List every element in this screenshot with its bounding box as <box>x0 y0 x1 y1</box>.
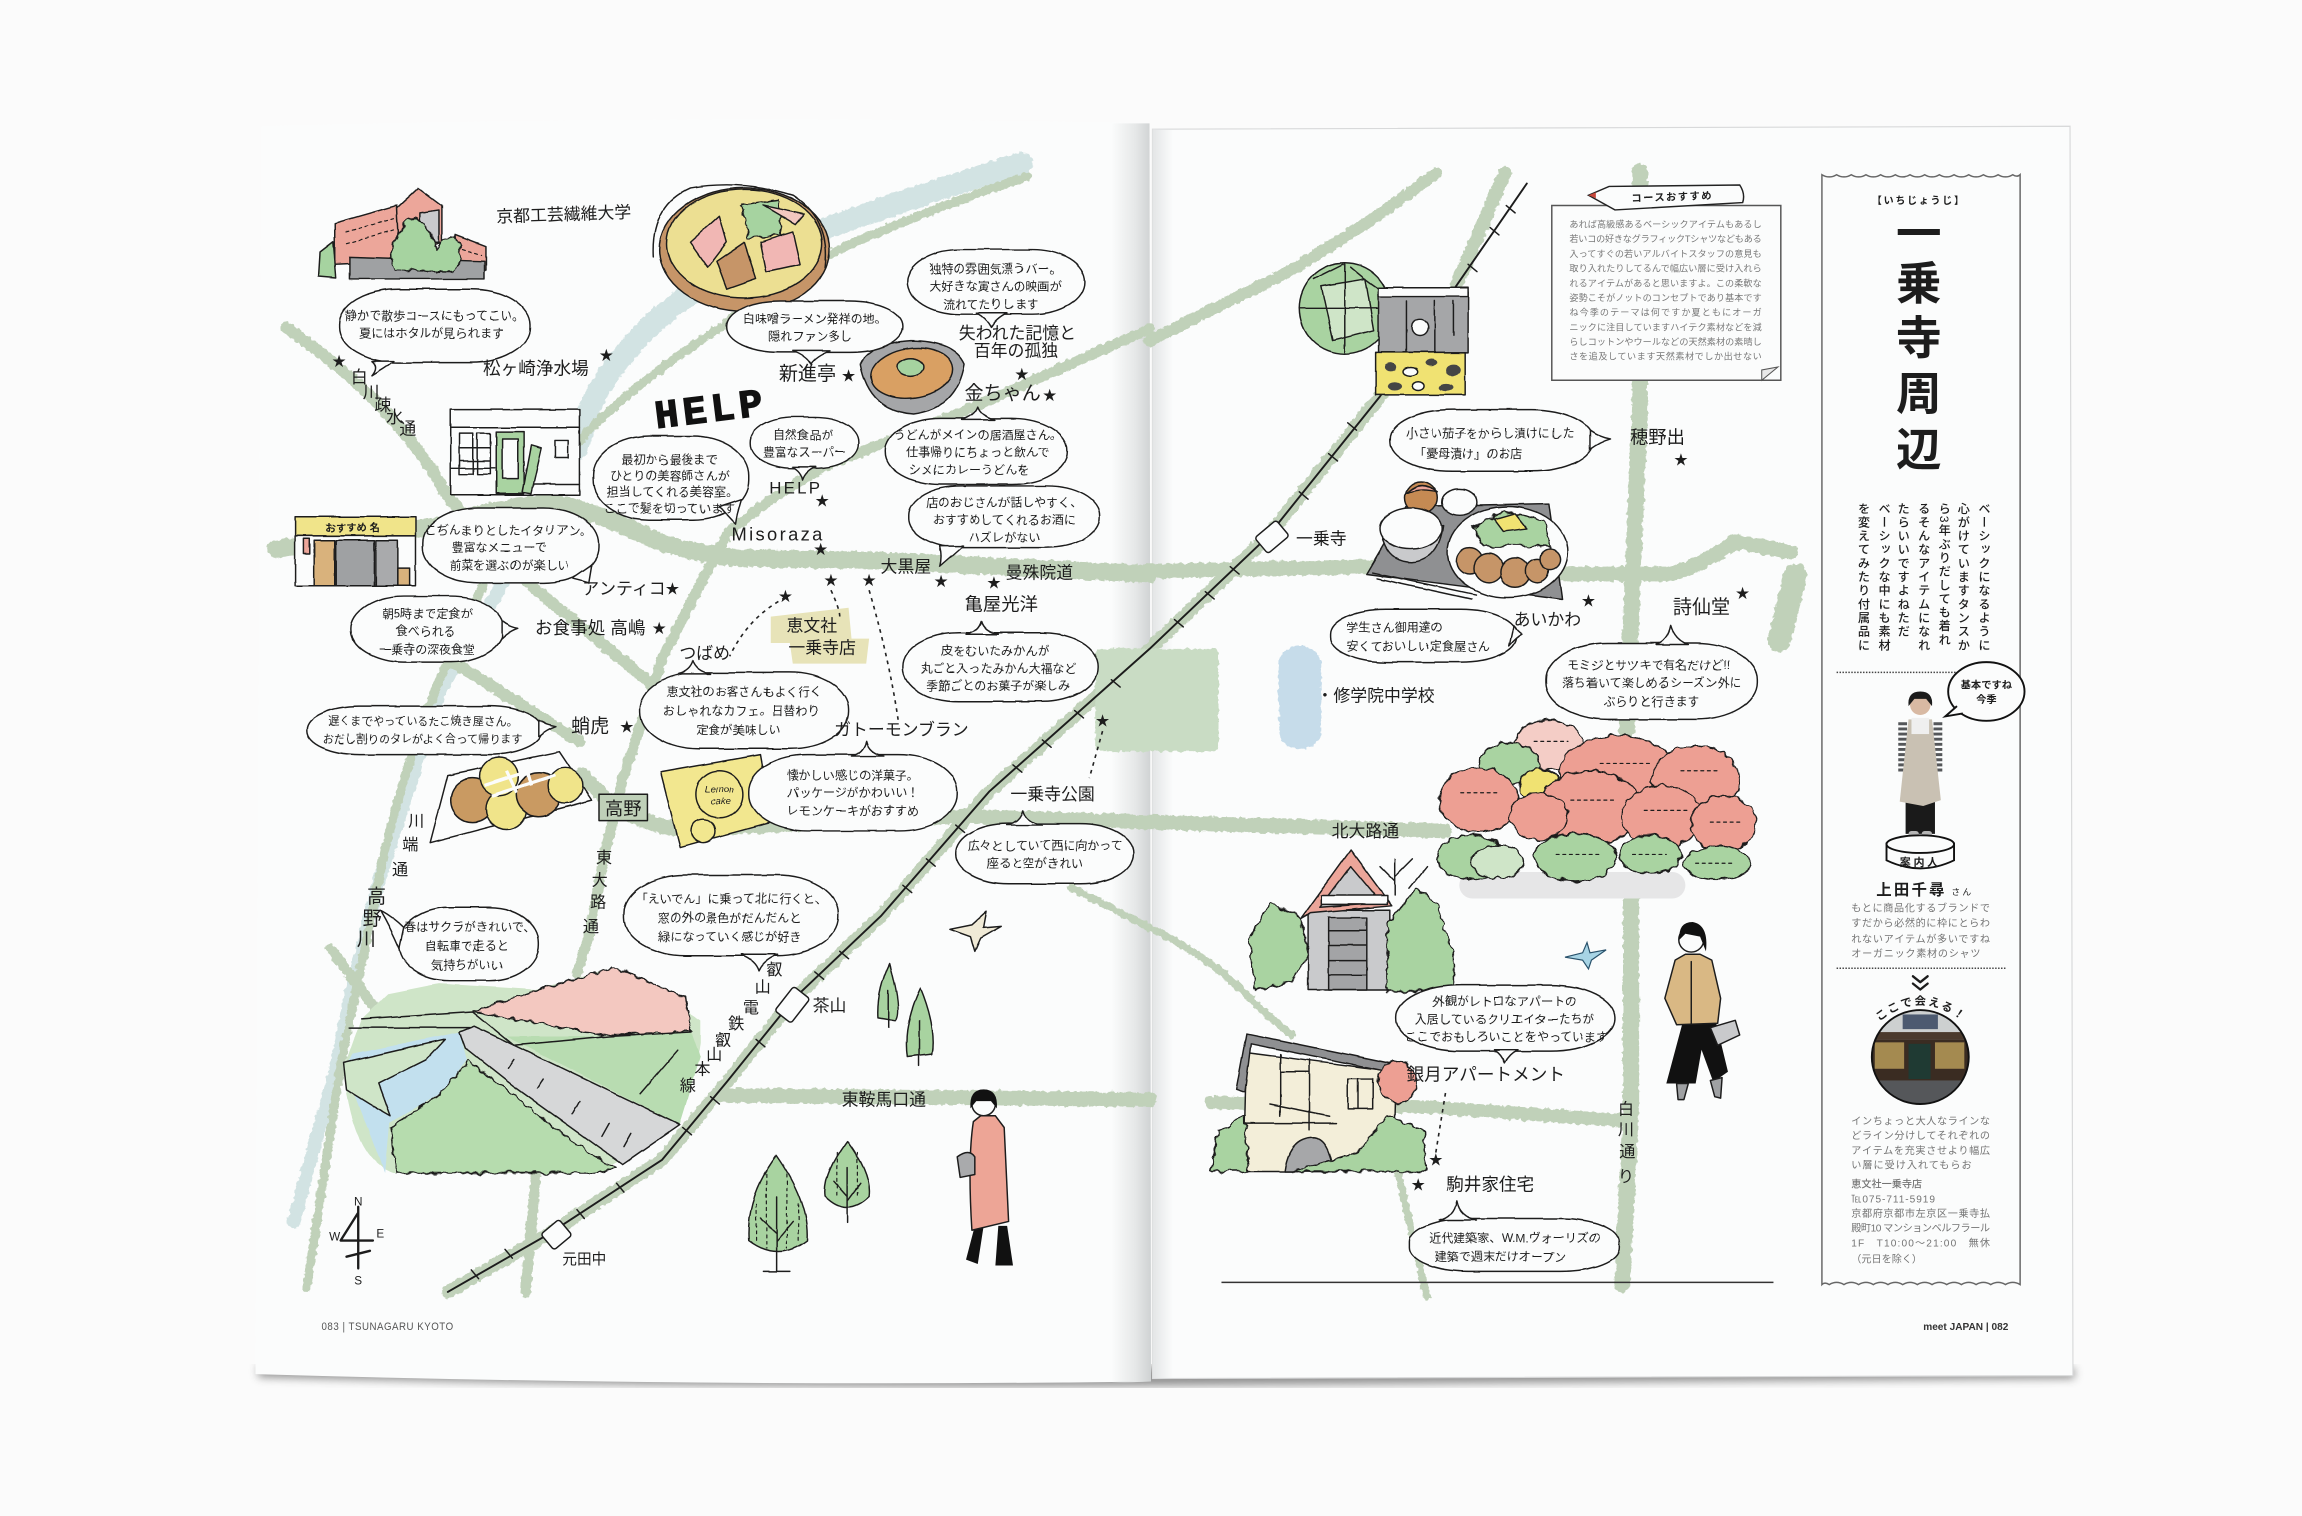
guide comment: オーガニック素材のシャツ <box>1851 947 1980 960</box>
pedestal: 案内人 <box>1900 855 1941 869</box>
speech bubble: 美容室: ここで髪を切っています <box>604 501 735 515</box>
compass <box>329 1195 384 1288</box>
speech bubble: アンティコ: こぢんまりとしたイタリアン。 <box>424 522 591 537</box>
title: 辺 <box>1896 424 1942 475</box>
shop info: 恵文社一乗寺店 <box>1851 1178 1922 1191</box>
label box: 高野: 高野 <box>605 798 642 819</box>
label: つばめ: つばめ <box>679 644 730 663</box>
stars: left page: ★ <box>778 586 793 606</box>
label: 川端通: 川端通 <box>392 813 424 879</box>
speech bubble: ガトーモンブラン: パッケージがかわいい！ <box>787 785 919 800</box>
speech bubble: 高嶋 <box>351 596 518 662</box>
illustration: ramen bowl <box>653 185 829 311</box>
label: 松ヶ崎浄水場: 松ヶ崎浄水場 <box>483 358 589 378</box>
illustration: gable building <box>1249 850 1453 991</box>
speech bubble: つばめ: 定食が美味しい <box>696 722 781 737</box>
speech bubble: 一乗寺公園: 座ると空がきれい <box>987 856 1083 871</box>
speech bubble: 亀屋光洋: 季節ごとのお菓子が楽しみ <box>926 678 1070 693</box>
stars: left page: ★ <box>823 570 839 590</box>
label: 東鞍馬口通: 東鞍馬口通 <box>842 1090 926 1109</box>
map labels: left page <box>351 203 1095 1268</box>
stars: left page: ★ <box>986 573 1001 593</box>
stars: left page: ★ <box>815 490 830 510</box>
pencil tag <box>1588 185 1744 210</box>
stars: left page <box>332 345 1110 737</box>
magazine spread <box>255 120 2074 1386</box>
speech bubble: 高野川 <box>380 907 539 981</box>
label: アンティコ: アンティコ <box>582 580 666 599</box>
speech bubble: 穂野出: 「憂母漬け」のお店 <box>1414 446 1522 461</box>
baseline rule <box>1221 1281 1773 1283</box>
road: 東鞍馬口通 <box>719 1095 1150 1100</box>
illustration: yellow pickle box <box>1376 352 1465 395</box>
station: 元田中 <box>541 1219 572 1250</box>
label: あいかわ: あいかわ <box>1514 610 1581 629</box>
guide name: 上田千尋 さん <box>1876 881 1973 899</box>
speech bubble: 銀月アパートメント <box>1396 985 1615 1063</box>
road: 東大路通 <box>526 329 1150 1292</box>
speech bubble: 銀月アパートメント: ここでおもしろいことをやっています <box>1404 1030 1608 1044</box>
illustration: meal tray <box>1367 482 1568 599</box>
logo: HELP: HELP <box>652 382 770 440</box>
shop info: ℡075-711-5919 <box>1851 1194 1935 1205</box>
note body: れるアイテムがあると思いますよ。この柔軟な <box>1569 277 1762 288</box>
speech bubble: 蛸虎: 遅くまでやっているたこ焼き屋さん。 <box>328 715 517 728</box>
vertical intro text: ベーシックな中にも素材 <box>1877 502 1891 652</box>
stars: left page: ★ <box>862 570 877 590</box>
illustration: shop facade <box>451 410 580 495</box>
speech bubble: 高嶋: 朝5時まで定食が <box>382 606 473 621</box>
speech bubble: アンティコ <box>423 508 599 583</box>
label: 大黒屋: 大黒屋 <box>881 558 931 577</box>
speech bubble: 駒井家住宅: 近代建築家、W.M.ヴォーリズの <box>1429 1230 1601 1245</box>
stars: left page: ★ <box>933 571 949 591</box>
speech bubble: HELP: 自然食品が <box>773 427 833 442</box>
label: 一乗寺公園: 一乗寺公園 <box>1010 785 1095 804</box>
illustration: cabbage ball <box>1299 263 1390 354</box>
stars: left page: ★ <box>1042 385 1057 405</box>
title: 乗 <box>1896 258 1942 309</box>
speech bubble: 美容室: 担当してくれる美容室。 <box>607 485 738 499</box>
shop comment: どライン分けしてそれぞれの <box>1851 1130 1990 1142</box>
label: 修学院中学校: ・修学院中学校 <box>1317 687 1435 706</box>
map labels: right page <box>1296 426 1730 1195</box>
label: お食事処 高嶋: お食事処 高嶋 <box>535 618 645 638</box>
speech bubble: 松ヶ崎: 静かで散歩コースにもってこい。 <box>345 308 524 323</box>
river <box>294 163 1022 1221</box>
station: 一乗寺 <box>1255 520 1289 554</box>
note body <box>1569 219 1762 362</box>
illustration: western house <box>1211 1034 1426 1172</box>
chevrons <box>1913 976 1928 989</box>
label: 茶山: 茶山 <box>813 997 846 1016</box>
shop info <box>1851 1178 1990 1266</box>
vertical intro text <box>1856 502 1991 652</box>
label: 詩仙堂: 詩仙堂 <box>1673 597 1730 619</box>
dashed leader lines: left page <box>730 590 1103 778</box>
compass: S <box>354 1275 362 1288</box>
speech bubble: 大黒屋: ハズレがない <box>968 530 1040 545</box>
label: 失われた記憶と: 失われた記憶と <box>959 324 1076 343</box>
speech bubble: 松ヶ崎: 夏にはホタルが見られます <box>360 326 504 341</box>
label: HELP shop: HELP <box>769 478 822 497</box>
speech bubble: アンティコ: 豊富なメニューで <box>451 541 547 555</box>
speech bubble: 大黒屋 <box>909 486 1100 567</box>
reading: 【いちじょうじ】 <box>1872 195 1966 207</box>
callout: tag 恵文社一乗寺店: 一乗寺店 <box>788 638 856 657</box>
illustration: university building <box>319 188 486 279</box>
callout: tag 恵文社一乗寺店 <box>771 608 869 664</box>
speech bubble: 新進亭: 白味噌ラーメン発祥の地。 <box>743 311 887 326</box>
stars: right page: ★ <box>1581 590 1596 610</box>
guide comment: れないアイテムが多いですね <box>1851 933 1990 946</box>
note paper <box>1552 206 1781 380</box>
shop info: 京都府京都市左京区一乗寺払 <box>1851 1207 1990 1220</box>
stars: right page <box>1411 449 1750 1195</box>
label: 駒井家住宅: 駒井家住宅 <box>1446 1175 1534 1195</box>
speech bubble: 高野川: 気持ちがいい <box>431 957 503 972</box>
speech bubble: 高野川: 自転車で走ると <box>425 939 509 953</box>
shop comment <box>1851 1115 1990 1172</box>
label: 穂野出: 穂野出 <box>1630 426 1685 447</box>
label: 白川通: 白川通り <box>1618 1100 1635 1186</box>
label box: 高野 <box>599 794 647 821</box>
illustration: trees <box>748 963 933 1271</box>
speech bubble: 金ちゃん <box>885 407 1067 484</box>
station: 茶山 <box>775 986 810 1023</box>
stars: left page: ★ <box>1095 711 1110 731</box>
stars: right page: ★ <box>1428 1150 1443 1170</box>
speech bubble: 大黒屋: 店のおじさんが話しやすく、 <box>926 494 1082 509</box>
guide comment: もとに商品化するブランドで <box>1851 902 1990 915</box>
guide comment <box>1851 902 1990 960</box>
speech bubble: 一乗寺公園: 広々としていて西に向かって <box>968 838 1123 853</box>
label: 金ちゃん: 金ちゃん <box>965 382 1041 404</box>
bush foliage <box>1437 719 1756 881</box>
road: 白川疎水通 <box>286 327 652 741</box>
shop info: 1F T10:00〜21:00 無休 <box>1851 1236 1990 1249</box>
speech bubble: 新進亭: 隠れファン多し <box>768 330 852 344</box>
stars: right page: ★ <box>1411 1175 1426 1195</box>
illustration: restaurant 名 <box>295 517 415 586</box>
label: 蛸虎: 蛸虎 <box>571 716 609 738</box>
label: 北大路通: 北大路通 <box>1332 822 1399 841</box>
illustration: lemon cake package: cake <box>711 797 731 808</box>
callout: tag 恵文社一乗寺店: 恵文社 <box>787 616 837 635</box>
note body: ね今季のテーマは何ですか夏ともにオーガ <box>1569 307 1762 318</box>
label: 新進亭: 新進亭 <box>779 363 836 385</box>
speech bubble: つばめ <box>640 661 849 749</box>
title: 周 <box>1896 369 1942 420</box>
speech bubble: 叡山電車 <box>624 875 838 970</box>
dashed leader: 銀月アパートメント <box>1436 1089 1446 1152</box>
speech bubble: 蛸虎: おだし割りのタレがよく合って帰ります <box>323 732 523 746</box>
illustration: small bowl <box>860 341 965 414</box>
speech bubble: 高嶋: 食べられる <box>396 625 456 639</box>
bush flecks <box>1461 741 1740 863</box>
stars: left page: ★ <box>599 345 614 365</box>
speech bubble: 失われた記憶と百年の孤独: 独特の雰囲気漂うバー。 <box>929 261 1061 276</box>
stars: left page: ★ <box>813 539 828 559</box>
speech bubble: 失われた記憶と百年の孤独: 大好きな寅さんの映画が <box>929 279 1061 294</box>
illustration: woman in tan coat <box>1665 922 1740 1100</box>
left page <box>255 120 1151 1383</box>
illustration: woman in pink coat <box>957 1089 1013 1265</box>
road: diagonal strand <box>307 176 1028 1288</box>
vertical intro text: ベーシックになるように <box>1976 502 1991 652</box>
title: 一 <box>1896 209 1942 260</box>
stars: right page: ★ <box>1735 583 1750 603</box>
speech bubble: 大黒屋: おすすめしてくれるお酒に <box>932 513 1076 527</box>
speech bubble: 詩仙堂: ぶらりと行きます <box>1604 695 1700 709</box>
speech bubble: 銀月アパートメント: 入居しているクリエイターたちが <box>1415 1011 1595 1026</box>
speech bubble: 詩仙堂: 落ち着いて楽しめるシーズン外に <box>1562 675 1741 690</box>
speech bubble: HELP <box>750 417 859 480</box>
speech bubble: 駒井家住宅 <box>1409 1201 1619 1271</box>
illustration: Takano river landscape <box>344 967 700 1173</box>
folio right: meet JAPAN | 082 <box>1923 1322 2009 1333</box>
shop info: 殿町10 マンションベルフラール <box>1851 1223 1990 1235</box>
label: 銀月アパートメント: 銀月アパートメント <box>1406 1065 1565 1085</box>
note body: さを追及しています天然素材でしか出せない <box>1569 351 1762 362</box>
road: railway bed <box>448 173 1505 1292</box>
label: 叡山電鉄叡山本線: 叡山電鉄叡山本線 <box>680 961 782 1095</box>
note body: 若いコの好きなグラフィックTシャツなどもある <box>1569 233 1762 244</box>
speech bubble: 基本ですね今季: 基本ですね <box>1961 679 2013 692</box>
speech bubble: アンティコ: 前菜を選ぶのが楽しい <box>449 558 570 573</box>
note body: 入ってすぐの若いアルバイトスタッフの意見も <box>1569 248 1762 259</box>
right page <box>1152 126 2073 1379</box>
speech bubble: 駒井家住宅: 建築で週末だけオープン <box>1435 1249 1566 1264</box>
speech bubble: 高野川: 春はサクラがきれいで、 <box>404 919 535 934</box>
compass: N <box>354 1195 362 1208</box>
illustration: lemon cake package: Lemon <box>705 785 734 796</box>
page shadow <box>258 1365 2074 1386</box>
stars: left page: ★ <box>1014 364 1029 384</box>
pencil tip <box>1588 192 1596 198</box>
gutter shading left <box>1111 123 1151 1383</box>
speech bubble: 叡山電車: 緑になっていく感じが好き <box>658 929 801 944</box>
label: 曼殊院道: 曼殊院道 <box>1006 563 1073 582</box>
label: 高野川: 高野川 <box>357 886 386 950</box>
speech bubble: 亀屋光洋 <box>903 621 1098 702</box>
sidebar panel <box>1821 173 2026 1286</box>
pedestal <box>1887 835 1954 869</box>
page curl <box>1762 367 1778 380</box>
folio left: 083 | TSUNAGARU KYOTO <box>322 1321 454 1333</box>
speech bubble: 蛸虎 <box>307 706 556 755</box>
stars: left page: ★ <box>841 366 856 386</box>
illustration: restaurant 名: おすすめ 名 <box>325 521 379 534</box>
speech bubble: ガトーモンブラン <box>749 741 957 831</box>
shop photo <box>1870 1009 1970 1105</box>
dotted divider <box>1837 671 2005 673</box>
shop comment: アイテムを充実させより幅広 <box>1851 1144 1990 1157</box>
title: 寺 <box>1896 313 1942 364</box>
shop comment: い層に受け入れてもらお <box>1851 1160 1972 1172</box>
speech bubble: 美容室: 最初から最後まで <box>621 453 718 467</box>
speech bubble: 金ちゃん: 仕事帰りにちょっと飲んで <box>906 445 1050 460</box>
gutter shading right <box>1152 129 1173 1379</box>
note heading: コースおすすめ <box>1631 190 1713 205</box>
label: 白川疎水通: 白川疎水通 <box>351 368 416 439</box>
speech bubble: つばめ: おしゃれなカフェ。日替わり <box>663 704 820 718</box>
stars: left page: ★ <box>652 618 667 638</box>
label: 東大路通: 東大路通 <box>583 849 612 936</box>
speech bubble: つばめ: 恵文社のお客さんもよく行く <box>666 684 822 699</box>
speech bubble: HELP: 豊富なスーパー <box>763 446 847 460</box>
speech bubble: あいかわ: 安くておいしい定食屋さん <box>1346 639 1490 653</box>
speech bubble: 美容室: ひとりの美容師さんが <box>610 468 729 483</box>
vertical intro text: ら3年ぶりだしても着れ <box>1937 502 1951 647</box>
speech bubble: 金ちゃん: シメにカレーうどんを <box>909 463 1029 477</box>
stars: left page: ★ <box>332 351 347 371</box>
shop comment: インちょっと大人なラインな <box>1851 1115 1990 1128</box>
compass: E <box>376 1228 384 1241</box>
speech bubble: 金ちゃん: うどんがメインの居酒屋さん。 <box>894 427 1062 442</box>
speech bubble: 穂野出 <box>1390 410 1611 471</box>
speech bubble: 亀屋光洋: 丸ごと入ったみかん大福など <box>920 660 1076 675</box>
speech bubble: ガトーモンブラン: レモンケーキがおすすめ <box>787 803 919 818</box>
illustration: azalea bush <box>1437 719 1756 898</box>
stars: right page: ★ <box>1673 449 1689 469</box>
speech bubble: 美容室 <box>593 436 749 524</box>
speech bubble: ガトーモンブラン: 懐かしい感じの洋菓子。 <box>787 768 919 783</box>
label: 一乗寺: 一乗寺 <box>1296 530 1347 549</box>
railway line <box>448 184 1527 1292</box>
note body: 姿勢こそがノットのコンセプトであり基本です <box>1569 292 1762 303</box>
speech bubble: 詩仙堂: モミジとサツキで有名だけど!! <box>1567 657 1730 672</box>
sidebar frame <box>1822 175 2020 1285</box>
speech bubble: 失われた記憶と百年の孤独 <box>907 250 1085 327</box>
title <box>1896 209 1942 475</box>
vertical intro text: 心がけていますタンスか <box>1956 502 1970 652</box>
speech bubble: 基本ですね今季: 今季 <box>1976 693 1997 706</box>
bush shadow <box>1459 872 1685 898</box>
guide comment: すだから必然的に枠にとらわ <box>1851 916 1990 929</box>
speech bubble: 高嶋: 一乗寺の深夜食堂 <box>379 642 475 656</box>
shop info: （元日を除く） <box>1851 1253 1922 1266</box>
compass: W <box>329 1231 341 1244</box>
roads: right page <box>1150 173 1436 341</box>
person photo <box>1900 691 1941 844</box>
vertical intro text: たらいいですよねただ <box>1896 502 1910 639</box>
note body: らしコットンやウールなどの天然素材の素晴し <box>1569 336 1762 347</box>
illustration: takoyaki <box>430 752 592 843</box>
stars: left page: ★ <box>665 579 680 599</box>
label: 京都工芸繊維大学: 京都工芸繊維大学 <box>496 203 632 227</box>
speech bubble: 失われた記憶と百年の孤独: 流れてたりします <box>943 297 1039 311</box>
roads <box>276 172 1795 1296</box>
dotted divider 2 <box>1837 967 2005 969</box>
speech bubble: 銀月アパートメント: 外観がレトロなアパートの <box>1433 994 1577 1009</box>
speech bubble: 基本ですね今季 <box>1945 662 2025 721</box>
illustration: pickles package <box>1379 288 1468 352</box>
speech bubble: 穂野出: 小さい茄子をからし漬けにした <box>1406 425 1574 440</box>
speech bubble: 新進亭 <box>727 301 903 364</box>
speech bubble: 詩仙堂 <box>1546 625 1757 719</box>
vertical intro text: るそんなアイテムになれ <box>1916 502 1930 652</box>
note body: ニックに注目していますハイテク素材などを減 <box>1569 321 1762 332</box>
note body: 取り入れたりしてるんで幅広い層に受け入れら <box>1569 263 1762 274</box>
speech bubble: 松ヶ崎 <box>339 289 530 376</box>
speech bubble: あいかわ <box>1330 609 1522 662</box>
speech bubble: あいかわ: 学生さん御用達の <box>1347 619 1443 634</box>
illustration: lemon cake package <box>661 755 772 847</box>
road: 北大路通 <box>583 775 1445 831</box>
stars: left page: ★ <box>619 717 634 737</box>
illustration: bird <box>950 912 1001 951</box>
label: ガトーモンブラン: ガトーモンブラン <box>834 720 969 740</box>
label: Misoraza: Misoraza <box>731 523 825 544</box>
speech bubble: 亀屋光洋: 皮をむいたみかんが <box>941 643 1049 658</box>
illustration: blue bird <box>1565 943 1606 969</box>
road: 曼殊院道 <box>276 502 1150 574</box>
speech bubble: 一乗寺公園 <box>956 810 1133 884</box>
label: 百年の孤独: 百年の孤独 <box>974 342 1058 361</box>
vertical intro text: を変えてみたり付属品に <box>1856 502 1870 652</box>
speech bubble: 叡山電車: 窓の外の景色がだんだんと <box>658 910 802 925</box>
note body: あれば高級感あるベーシックアイテムもあるし <box>1569 219 1762 230</box>
label: 元田中: 元田中 <box>562 1251 606 1268</box>
label: 亀屋光洋: 亀屋光洋 <box>965 594 1038 615</box>
speech bubble: 叡山電車: 「えいでん」に乗って北に行くと、 <box>636 892 827 906</box>
arc heading: ここで会える！ <box>1876 995 1962 1020</box>
note panel: コースおすすめ <box>1552 185 1781 380</box>
pond <box>1279 646 1321 749</box>
park block <box>1095 649 1219 752</box>
